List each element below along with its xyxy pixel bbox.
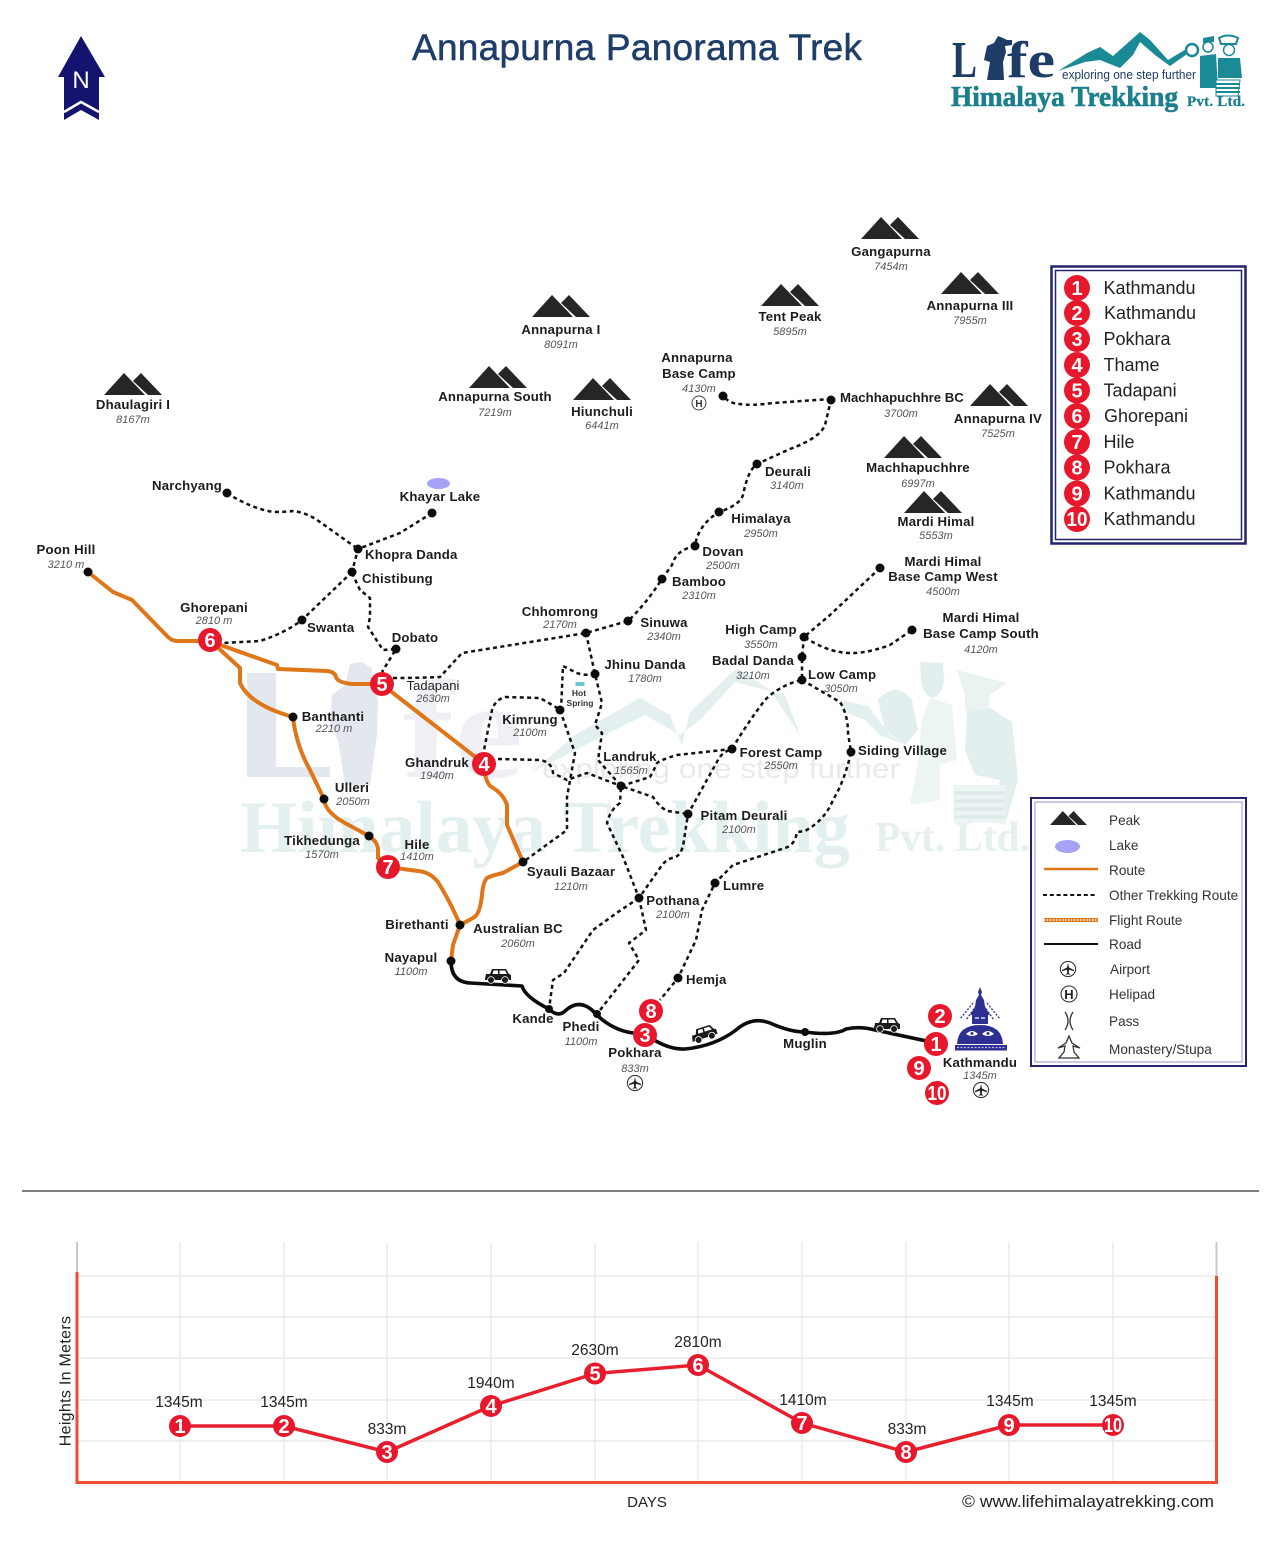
place labels: west side: Dobato — [392, 630, 438, 645]
route day badges on map: 7 — [382, 857, 394, 879]
watermark logo: fe — [403, 653, 523, 808]
chart: altitude profile: 10 — [1104, 1415, 1122, 1437]
place labels: Mardi Himal trek: Forest Camp — [740, 745, 822, 760]
place labels: west side: 2210 m — [315, 723, 352, 735]
chart: altitude profile: 2 — [278, 1416, 290, 1438]
place labels: west side: Tadapani — [407, 678, 459, 693]
label: Annapurna Base Camp with helipad: Base Camp — [662, 366, 736, 381]
place labels: west side: 2050m — [335, 796, 370, 808]
label: Annapurna Base Camp with helipad: H — [695, 399, 703, 410]
place labels: central: Ghandruk — [405, 755, 469, 770]
place labels: upper valley: 2500m — [705, 560, 740, 572]
peak labels: Hiunchuli — [571, 404, 633, 419]
chart: altitude profile: 9 — [1003, 1415, 1015, 1437]
logo: Life Himalaya Trekking: Himalaya Trekking — [951, 82, 1178, 113]
peak labels: 5895m — [773, 326, 807, 338]
place labels: central: Pothana — [646, 893, 700, 908]
place labels: Mardi Himal trek: Mardi Himal — [905, 554, 981, 569]
place labels: Mardi Himal trek — [701, 554, 1039, 893]
place labels: road side: Birethanti — [385, 917, 449, 932]
chart: altitude profile: 1345m — [260, 1394, 308, 1411]
panel: map key legend: Road — [1109, 937, 1142, 952]
place labels: upper valley: Jhinu Danda — [604, 657, 686, 672]
chart: altitude profile: 1345m — [1089, 1393, 1137, 1410]
chart: altitude profile: 833m — [368, 1421, 406, 1438]
logo: Life Himalaya Trekking: exploring one step further — [1062, 67, 1197, 82]
waypoint dots — [84, 392, 916, 1036]
place labels: central: 1210m — [554, 881, 588, 893]
panel: map key legend: Route — [1109, 863, 1145, 878]
panel: map key legend: H — [1064, 987, 1074, 1002]
peak labels: Annapurna South — [438, 389, 552, 404]
place labels: Mardi Himal trek: Low Camp — [808, 667, 876, 682]
panel: itinerary legend: 7 — [1071, 432, 1083, 454]
place labels: upper valley: 2950m — [743, 528, 778, 540]
watermark logo: Himalaya Trekking — [240, 787, 850, 869]
stupa icon: Kathmandu — [955, 987, 1007, 1050]
peak labels: Mardi Himal — [898, 514, 974, 529]
north arrow: N — [72, 67, 90, 94]
place labels: road side: Kande — [512, 1011, 554, 1026]
place labels: road side: Australian BC — [473, 921, 563, 936]
place labels: road side: Muglin — [783, 1036, 827, 1051]
chart: altitude profile: 8 — [900, 1442, 912, 1464]
place labels: central: 2100m — [655, 909, 690, 921]
label: Annapurna Base Camp with helipad — [661, 350, 736, 410]
hot spring marker — [576, 682, 584, 686]
place labels: road side: 1345m — [963, 1070, 997, 1082]
panel: map key legend: Airport — [1110, 962, 1150, 977]
place labels: west side: Ulleri — [335, 780, 369, 795]
chart: altitude profile: 4 — [485, 1396, 497, 1418]
panel: itinerary legend: 5 — [1071, 380, 1083, 402]
peak labels: 8091m — [544, 339, 578, 351]
chart: altitude profile: 6 — [692, 1355, 704, 1377]
website credit: © www.lifehimalayatrekking.com — [962, 1492, 1214, 1511]
peak labels: Gangapurna — [851, 244, 931, 259]
chart: altitude profile: 1345m — [155, 1394, 203, 1411]
chart: altitude profile: 5 — [589, 1364, 601, 1386]
place labels: west side: Hile — [404, 837, 430, 852]
place labels: road side: Phedi — [563, 1019, 599, 1034]
place labels: upper valley: Himalaya — [731, 511, 791, 526]
panel: itinerary legend: 10 — [1066, 509, 1088, 531]
place labels: road side: 1100m — [565, 1036, 597, 1048]
panel: itinerary legend: Pokhara — [1104, 329, 1172, 349]
mountain peaks — [104, 217, 1028, 513]
place labels: Mardi Himal trek: Lumre — [723, 878, 764, 893]
panel: itinerary legend: 2 — [1071, 303, 1083, 325]
peak labels — [96, 244, 1042, 542]
panel: itinerary legend: 1 — [1071, 278, 1083, 300]
place labels: west side: Khayar Lake — [400, 489, 480, 504]
place labels: upper valley: Deurali — [765, 464, 811, 479]
place labels: upper valley: 3700m — [884, 408, 918, 420]
place labels: west side: 1410m — [400, 851, 434, 863]
panel: map key legend: Peak — [1109, 813, 1140, 828]
place labels: central: 2100m — [512, 727, 547, 739]
place labels: upper valley: Bamboo — [672, 574, 726, 589]
peak labels: Machhapuchhre — [866, 460, 970, 475]
panel: itinerary legend: Kathmandu — [1104, 278, 1196, 298]
place labels: west side: Ghorepani — [180, 600, 248, 615]
route day badges on map: 3 — [639, 1025, 651, 1047]
panel: itinerary legend: Ghorepani — [1104, 406, 1188, 426]
north arrow — [58, 36, 105, 120]
route day badges on map: 5 — [376, 674, 388, 696]
route day badges on map: 6 — [204, 630, 216, 652]
place labels: Mardi Himal trek: Base Camp South — [923, 626, 1039, 641]
place labels: Mardi Himal trek: Mardi Himal — [943, 610, 1019, 625]
panel: itinerary legend: 4 — [1071, 355, 1083, 377]
peak labels: Annapurna III — [927, 298, 1013, 313]
place labels: west side — [37, 478, 480, 863]
place labels: Mardi Himal trek: Badal Danda — [712, 653, 794, 668]
panel: itinerary legend: Tadapani — [1104, 380, 1177, 400]
route day badges on map — [198, 628, 952, 1105]
chart: altitude profile: 2810m — [674, 1334, 722, 1351]
main trek route — [88, 572, 523, 961]
lake: Khayar Lake — [427, 478, 450, 489]
panel: itinerary legend: 3 — [1071, 329, 1083, 351]
place labels: road side: Hemja — [686, 972, 727, 987]
place labels: central: Kimrung — [502, 712, 558, 727]
panel: map key legend: Monastery/Stupa — [1109, 1042, 1212, 1057]
place labels: road side: Pokhara — [608, 1045, 662, 1060]
chart axis label: days: DAYS — [627, 1494, 667, 1511]
title: Annapurna Panorama Trek — [412, 27, 862, 68]
peak labels: 7219m — [478, 407, 512, 419]
place labels: road side: 2060m — [500, 938, 535, 950]
peak labels: 7454m — [874, 261, 908, 273]
panel: itinerary legend: Kathmandu — [1104, 303, 1196, 323]
chart: altitude profile: 833m — [888, 1421, 926, 1438]
logo: Life Himalaya Trekking: L — [952, 32, 977, 89]
place labels: west side: Khopra Danda — [365, 547, 458, 562]
chart: altitude profile: 7 — [796, 1413, 808, 1435]
route day badges on map: 2 — [934, 1006, 946, 1028]
panel: map key legend: Lake — [1109, 838, 1138, 853]
road — [451, 961, 936, 1049]
place labels: central: Spring — [567, 698, 593, 708]
place labels: road side — [385, 917, 1017, 1082]
place labels: central: 1565m — [614, 765, 648, 777]
watermark logo: exploring one step further — [542, 753, 900, 784]
place labels: west side: 2630m — [415, 693, 450, 705]
chart: altitude profile: 1410m — [779, 1392, 827, 1409]
watermark logo — [240, 653, 1030, 869]
place labels: road side: 833m — [621, 1063, 649, 1075]
place labels: west side: 1570m — [305, 849, 339, 861]
place labels: Mardi Himal trek: Pitam Deurali — [701, 808, 787, 823]
other trekking routes — [223, 396, 912, 1014]
place labels: west side: Chistibung — [362, 571, 433, 586]
peak labels: 6441m — [585, 420, 619, 432]
peak labels: 7955m — [953, 315, 987, 327]
place labels: central: Landruk — [603, 749, 657, 764]
place labels: upper valley: 2310m — [681, 590, 716, 602]
logo: Life Himalaya Trekking: fe — [1007, 32, 1055, 89]
panel: itinerary legend: Pokhara — [1104, 458, 1172, 478]
place labels: upper valley: 1780m — [628, 673, 662, 685]
place labels: central: Syauli Bazaar — [527, 864, 615, 879]
place labels: Mardi Himal trek: 2100m — [721, 824, 756, 836]
peak labels: 7525m — [981, 428, 1015, 440]
place labels: west side: Poon Hill — [37, 542, 95, 557]
peak labels: Dhaulagiri I — [96, 397, 170, 412]
route day badges on map: 1 — [930, 1034, 942, 1056]
place labels: west side: 2810 m — [195, 615, 232, 627]
place labels: central: 1940m — [420, 770, 454, 782]
route day badges on map: 4 — [478, 754, 490, 776]
panel: itinerary legend: Kathmandu — [1104, 484, 1196, 504]
place labels: west side: Narchyang — [152, 478, 222, 493]
panel: itinerary legend: 6 — [1071, 406, 1083, 428]
place labels: upper valley: 3140m — [770, 480, 804, 492]
panel: itinerary legend — [1052, 266, 1246, 544]
chart: altitude profile: 2630m — [571, 1342, 619, 1359]
panel: map key legend: Other Trekking Route — [1109, 888, 1238, 903]
chart: altitude profile: 3 — [381, 1442, 393, 1464]
chart: altitude profile: 1345m — [986, 1393, 1034, 1410]
place labels: west side: Banthanti — [302, 709, 364, 724]
label: Annapurna Base Camp with helipad: 4130m — [682, 383, 716, 395]
watermark logo: Pvt. Ltd. — [875, 815, 1030, 861]
panel: itinerary legend: Hile — [1104, 432, 1135, 452]
place labels: Mardi Himal trek: 3210m — [736, 670, 770, 682]
place labels: upper valley: 2340m — [646, 631, 681, 643]
place labels: upper valley: Sinuwa — [640, 615, 688, 630]
place labels: Mardi Himal trek: 4500m — [926, 586, 960, 598]
place labels: upper valley: Chhomrong — [522, 604, 598, 619]
panel: itinerary legend: 9 — [1071, 484, 1083, 506]
peak labels: Annapurna IV — [954, 411, 1042, 426]
peak labels: 5553m — [919, 530, 953, 542]
label: Annapurna Base Camp with helipad: Annapurna — [661, 350, 733, 365]
chart axis label: heights: Heights In Meters — [58, 1316, 74, 1446]
jeep icons — [485, 969, 900, 1045]
airport icons — [627, 1075, 989, 1098]
peak labels: Annapurna I — [521, 322, 601, 337]
panel: itinerary legend: Thame — [1104, 355, 1160, 375]
place labels: road side: 1100m — [395, 966, 427, 978]
route day badges on map: 8 — [645, 1001, 657, 1023]
place labels: west side: Tikhedunga — [284, 833, 360, 848]
place labels: Mardi Himal trek: 4120m — [964, 644, 998, 656]
place labels: Mardi Himal trek: 3550m — [744, 639, 778, 651]
watermark: three trekking figures — [878, 662, 1018, 825]
chart: altitude profile — [77, 1242, 1216, 1482]
place labels: central — [405, 688, 700, 921]
place labels: road side: Nayapul — [385, 950, 437, 965]
peak labels: 8167m — [116, 414, 150, 426]
route day badges on map: 9 — [913, 1058, 925, 1080]
peak labels: 6997m — [901, 478, 935, 490]
chart: altitude profile: 1940m — [467, 1375, 515, 1392]
place labels: upper valley — [522, 390, 964, 685]
place labels: central: Hot — [572, 688, 586, 698]
route day badges on map: 10 — [928, 1083, 946, 1105]
place labels: road side: Kathmandu — [943, 1055, 1017, 1070]
place labels: Mardi Himal trek: Siding Village — [858, 743, 947, 758]
place labels: west side: 3210 m — [48, 559, 84, 571]
place labels: upper valley: Machhapuchhre BC — [840, 390, 964, 405]
place labels: Mardi Himal trek: 3050m — [824, 683, 858, 695]
chart: altitude profile: 1 — [174, 1416, 186, 1438]
panel: map key legend: Flight Route — [1109, 913, 1182, 928]
panel: map key legend — [1031, 798, 1246, 1066]
panel: map key legend: Pass — [1109, 1014, 1139, 1029]
peak labels: Tent Peak — [758, 309, 822, 324]
panel: map key legend: Helipad — [1109, 987, 1155, 1002]
panel: itinerary legend: Kathmandu — [1104, 509, 1196, 529]
logo: Life Himalaya Trekking: Pvt. Ltd. — [1187, 94, 1245, 110]
place labels: Mardi Himal trek: Base Camp West — [888, 569, 998, 584]
place labels: Mardi Himal trek: 2550m — [763, 760, 798, 772]
place labels: upper valley: Dovan — [702, 544, 744, 559]
place labels: Mardi Himal trek: High Camp — [725, 622, 797, 637]
place labels: west side: Swanta — [307, 620, 355, 635]
panel: itinerary legend: 8 — [1071, 458, 1083, 480]
place labels: upper valley: 2170m — [542, 619, 577, 631]
logo: Life Himalaya Trekking — [951, 32, 1245, 113]
